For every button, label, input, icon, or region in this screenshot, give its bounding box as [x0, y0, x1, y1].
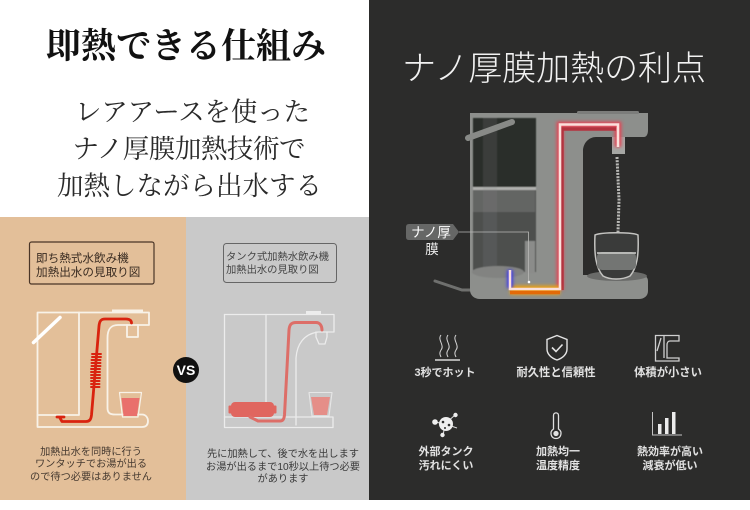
text block: description: [57, 97, 322, 201]
water stream: [617, 157, 619, 232]
heating path glow: [510, 124, 618, 292]
icon: cup: [120, 392, 142, 417]
label box: instant type: 加熱出水の見取り図: [36, 266, 140, 279]
label box: tank type: タンク式加熱水飲み機: [226, 250, 329, 263]
diagram: instant heating machine: [34, 310, 149, 427]
text block: tank caption: があります: [258, 472, 308, 485]
icon: thermometer: [551, 413, 561, 438]
feature: uniform heating: 加熱均一: [536, 444, 580, 458]
power cord: [435, 281, 474, 290]
text block: description: レアアースを使った: [75, 97, 310, 127]
VS badge: VS: [177, 362, 195, 378]
label box: instant type: 即ち熱式水飲み機: [36, 251, 129, 265]
text block: tank caption: 先に加熱して、後で水を出します: [207, 447, 359, 460]
icon: shield: [547, 336, 567, 360]
feature: 3 second heat: [414, 335, 476, 379]
feature: high efficiency: [637, 412, 703, 472]
heater tank and hot water line: [228, 322, 322, 421]
text block: instant caption: ので待つ必要はありません: [30, 470, 152, 483]
panel: tank type comparison: [186, 217, 369, 500]
panel: nano film benefits: [369, 0, 750, 500]
text block: description: 加熱しながら出水する: [57, 171, 322, 201]
text block: description: ナノ厚膜加熱技術で: [72, 134, 306, 164]
feature: compact: 体積が小さい: [634, 365, 702, 379]
label box: tank type: 加熱出水の見取り図: [226, 263, 319, 276]
icon: machine outline: [656, 336, 679, 361]
feature: no external tank dirt: [418, 413, 474, 472]
water tank: [472, 118, 536, 278]
panel: instant heating comparison: [0, 217, 186, 500]
glass: [587, 233, 647, 281]
label box: tank type: [224, 244, 336, 282]
text block: tank caption: お湯が出るまで10秒以上待つ必要: [206, 460, 360, 473]
callout: nano film: ナノ厚: [411, 225, 451, 240]
text block: tank caption: [206, 447, 360, 485]
callout: nano film: 膜: [425, 242, 439, 257]
feature: durability: 耐久性と信頼性: [516, 365, 596, 379]
heading: ナノ厚膜加熱の利点: [402, 50, 706, 88]
icon: cup: [309, 392, 332, 416]
feature: 3 second heat: 3秒でホット: [414, 365, 476, 379]
text block: instant caption: 加熱出水を同時に行う: [40, 445, 142, 458]
text block: instant caption: ワンタッチでお湯が出る: [35, 457, 147, 470]
VS badge: [173, 357, 199, 383]
hot water line with coil: [57, 319, 132, 422]
feature: compact: [634, 336, 702, 379]
tank handle: [468, 122, 512, 138]
callout: nano film: [406, 224, 530, 283]
icon: bar chart: [652, 412, 682, 435]
faucet nozzle: [612, 137, 625, 154]
photo: water dispenser: [406, 111, 648, 299]
label box: instant type: [30, 242, 154, 284]
feature: high efficiency: 熱効率が高い: [637, 444, 703, 458]
machine body: [470, 113, 648, 299]
title: 即熱できる仕組み: [46, 27, 326, 66]
diagram: tank heating machine: [224, 311, 334, 428]
feature: no external tank dirt: 外部タンク: [418, 444, 474, 458]
icon: virus: [432, 413, 458, 437]
icon: steam: [435, 335, 460, 360]
feature: uniform heating: 温度精度: [536, 458, 580, 472]
panel: top left heading area: [0, 0, 369, 217]
text block: instant caption: [30, 445, 152, 483]
feature: durability: [516, 336, 596, 379]
feature: uniform heating: [536, 413, 580, 472]
feature: high efficiency: 減衰が低い: [642, 458, 698, 472]
feature: no external tank dirt: 汚れにくい: [419, 458, 473, 472]
